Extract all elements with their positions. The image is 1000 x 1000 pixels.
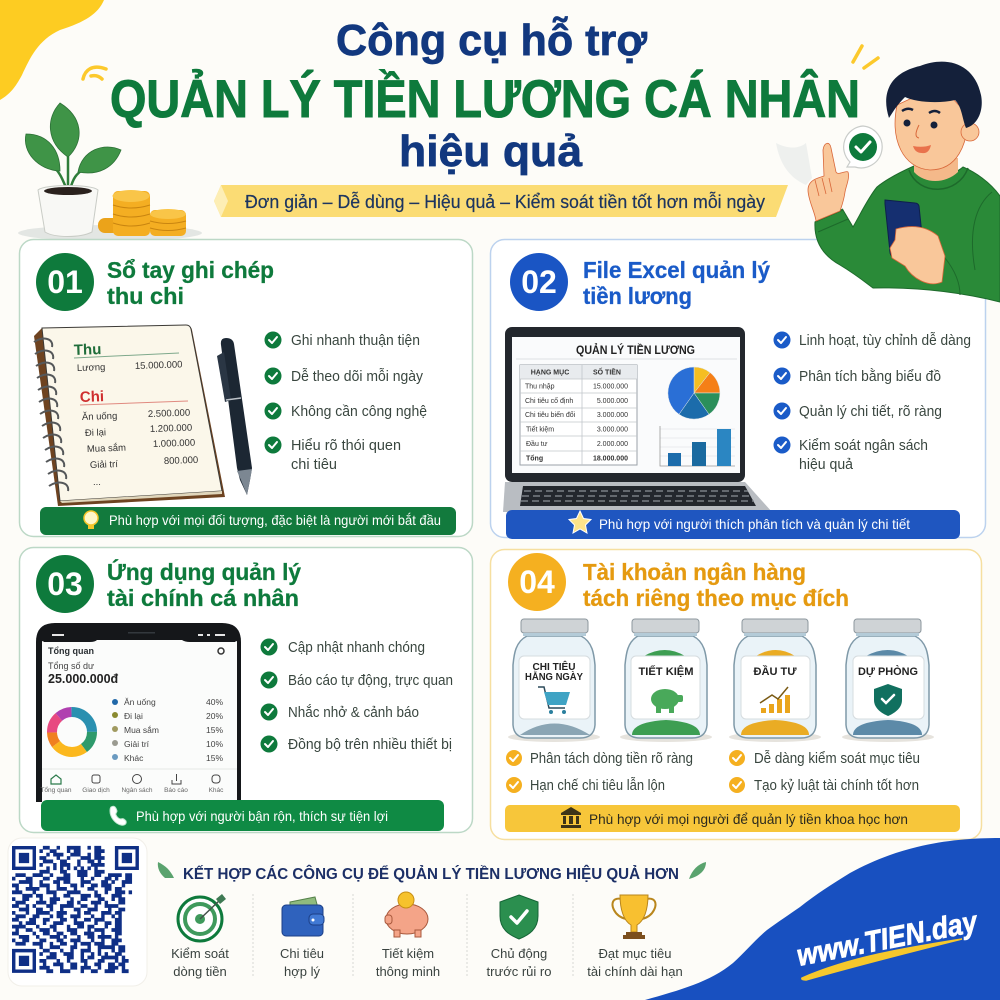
spreadsheet table: Chi tiêu cố định: [525, 396, 573, 405]
heading 03: Ứng dụng quản lý: [107, 558, 301, 585]
illustration: man with phone: [776, 46, 1000, 302]
icon: notebook: 15.000.000: [135, 359, 183, 372]
bullet: Kiểm soát ngân sách: [799, 438, 928, 454]
footer benefits: [171, 892, 683, 979]
icon: target: [178, 894, 226, 941]
spreadsheet table: 3.000.000: [597, 426, 628, 434]
app nav bar: Khác: [209, 787, 224, 794]
heading 03: [107, 558, 301, 611]
footer heading: KẾT HỢP CÁC CÔNG CỤ ĐỂ QUẢN LÝ TIỀN LƯƠNG HIỆU QUẢ HƠN: [183, 865, 679, 883]
donut legend: Đi lại: [124, 711, 143, 721]
icon: rising bars: [760, 687, 790, 713]
banner 02: Phù hợp với người thích phân tích và quản lý chi tiết: [599, 516, 910, 532]
icon: leaf left: [158, 862, 174, 878]
speech bubble check: [844, 126, 882, 168]
paper smudge: [776, 143, 812, 185]
app nav bar: Ngân sách: [121, 787, 153, 794]
jar: đầu tư: ĐẦU TƯ: [754, 665, 797, 678]
phone app mockup: Tổng quan: [48, 646, 94, 656]
icon: notebook: Đi lại: [85, 427, 106, 439]
yellow corner blob: [0, 0, 104, 100]
hair: [886, 62, 982, 128]
icon: notebook: Lương: [77, 362, 106, 374]
icon: light bulb: [84, 511, 98, 529]
title: QUẢN LÝ TIỀN LƯƠNG CÁ NHÂN: [110, 68, 860, 129]
spreadsheet table: 5.000.000: [597, 398, 628, 405]
heading 02: [583, 257, 770, 309]
head: [895, 85, 968, 170]
donut legend: 10%: [206, 739, 223, 749]
benefit label: tài chính dài hạn: [587, 964, 683, 979]
icon: notebook: 1.000.000: [153, 438, 195, 450]
heading 02: File Excel quản lý: [583, 257, 770, 283]
icon: star: [569, 511, 591, 533]
bullet list 03: [260, 638, 453, 753]
icon: piggy bank: [385, 892, 428, 937]
app nav bar: Tổng quan: [40, 786, 72, 794]
icon: notebook: Mua sắm: [87, 443, 126, 455]
heading 04: Tài khoản ngân hàng: [583, 559, 806, 585]
bullet: chi tiêu: [291, 457, 337, 473]
banner 01: [40, 507, 456, 535]
banner 03: Phù hợp với người bận rộn, thích sự tiện lợi: [136, 808, 388, 824]
donut legend: 40%: [206, 697, 223, 707]
icon: pen: [217, 338, 252, 495]
bullet list 02: [774, 332, 971, 473]
jar: đầu tư: [729, 619, 821, 742]
blue corner with website: [645, 838, 1000, 1000]
icon: wallet: [282, 897, 324, 936]
benefit label: Đạt mục tiêu: [599, 946, 671, 961]
icon: notebook: 800.000: [164, 455, 198, 467]
bullet: [264, 436, 401, 473]
benefit label: hợp lý: [284, 964, 320, 979]
heading 03: tài chính cá nhân: [107, 585, 299, 611]
phone app mockup: 25.000.000đ: [48, 672, 119, 686]
icon: notebook: Chi: [80, 388, 104, 406]
subtitle ribbon: [214, 185, 788, 217]
panel: 01 notebook: [20, 240, 472, 536]
title: [110, 15, 860, 176]
icon: notebook: 1.200.000: [150, 423, 192, 435]
pie chart: [668, 367, 720, 419]
spreadsheet table: Tiết kiệm: [526, 424, 554, 434]
title: Công cụ hỗ trợ: [336, 15, 648, 65]
banner 01: Phù hợp với mọi đối tượng, đặc biệt là người mới bắt đầu: [109, 512, 441, 528]
number badge 03: 03: [47, 566, 83, 602]
number badge 01: [36, 253, 94, 311]
banner 03: [41, 800, 444, 831]
spreadsheet table: SỐ TIỀN: [593, 366, 621, 376]
icon: green shield: [500, 895, 538, 939]
donut legend: 20%: [206, 711, 223, 721]
pointing hand: [808, 143, 849, 221]
benefit label: Chủ động: [491, 946, 547, 961]
panel: 03 app: [20, 548, 472, 832]
benefit label: dòng tiền: [173, 964, 227, 979]
bullet: Nhắc nhở & cảnh báo: [288, 704, 419, 721]
icon: notebook: Giải trí: [90, 459, 118, 471]
jar: tiết kiệm: TIẾT KIỆM: [638, 665, 694, 678]
panel: 02 excel: [490, 240, 986, 539]
phone: [885, 200, 922, 257]
number badge 02: 02: [521, 264, 557, 300]
icon: notebook: 2.500.000: [148, 408, 190, 420]
bullet: Dễ dàng kiểm soát mục tiêu: [754, 750, 920, 767]
icon: bank: [561, 807, 581, 828]
subtitle ribbon: Đơn giản – Dễ dùng – Hiệu quả – Kiểm soát tiền tốt hơn mỗi ngày: [245, 191, 765, 212]
sweater: [815, 166, 1000, 302]
spreadsheet table: [520, 365, 637, 465]
icon: laptop with spreadsheet: [503, 327, 772, 512]
benefit label: thông minh: [376, 964, 440, 979]
bullet: Báo cáo tự động, trực quan: [288, 673, 453, 689]
panel: 04 bank accounts: [490, 550, 982, 840]
spreadsheet table: 18.000.000: [593, 456, 628, 462]
website address: www.TIEN.day: [794, 905, 981, 973]
number badge 04: 04: [519, 564, 555, 600]
icon: notebook: Thu: [74, 341, 102, 359]
app nav bar: Báo cáo: [164, 787, 188, 794]
heading 04: tách riêng theo mục đích: [583, 585, 849, 611]
benefit label: Kiểm soát: [171, 946, 229, 961]
icon: teal shield: [874, 684, 902, 716]
bullet list 01: [264, 332, 427, 473]
donut legend: Khác: [124, 753, 144, 763]
jar: chi tiêu hằng ngày: HẰNG NGÀY: [525, 670, 583, 683]
bullet: Hiểu rõ thói quen: [291, 438, 401, 454]
heading 01: Sổ tay ghi chép: [107, 257, 274, 283]
spreadsheet table: 15.000.000: [593, 384, 628, 390]
number badge 02: [510, 253, 568, 311]
icon: yellow sparks right: [853, 46, 878, 68]
donut chart: [52, 712, 92, 752]
app nav bar: [40, 774, 224, 794]
heading 01: thu chi: [107, 283, 184, 309]
holding hand: [890, 227, 945, 284]
icon: notebook: ...: [93, 477, 101, 488]
bullet list 04: [506, 750, 920, 794]
jar: dự phòng: [842, 619, 934, 742]
phone app mockup: Tổng số dư: [48, 661, 94, 671]
spreadsheet table: Tổng: [526, 454, 543, 462]
benefit label: trước rủi ro: [487, 964, 551, 979]
bullet: Phân tách dòng tiền rõ ràng: [530, 751, 693, 767]
benefit label: Chi tiêu: [280, 946, 324, 961]
bullet: Ghi nhanh thuận tiện: [291, 333, 420, 349]
donut legend: 15%: [206, 725, 223, 735]
banner 04: Phù hợp với mọi người để quản lý tiền khoa học hơn: [589, 811, 908, 827]
bullet: Dễ theo dõi mỗi ngày: [291, 368, 424, 385]
icon: cart: [538, 687, 570, 714]
spreadsheet table: 3.000.000: [597, 412, 628, 419]
heading 02: tiền lương: [583, 283, 692, 309]
number badge 04: [508, 553, 566, 611]
jar: chi tiêu hằng ngày: CHI TIÊU: [532, 660, 576, 673]
bullet: [774, 436, 928, 473]
spreadsheet table: Chi tiêu biến đổi: [525, 410, 576, 419]
spreadsheet table: 2.000.000: [597, 441, 628, 448]
icon: telephone: [110, 806, 126, 825]
bullet: Tạo kỷ luật tài chính tốt hơn: [754, 778, 919, 794]
number badge 03: [36, 555, 94, 613]
donut legend: 15%: [206, 753, 223, 763]
yellow underline: [802, 939, 962, 980]
icon: laptop with spreadsheet: QUẢN LÝ TIỀN LƯƠNG: [576, 344, 695, 357]
neck: [914, 158, 958, 181]
face details: [902, 109, 940, 153]
bullet: Hạn chế chi tiêu lẫn lộn: [530, 777, 665, 794]
icon: green piggy: [651, 689, 683, 713]
icon: leaf right: [689, 862, 706, 879]
icon: trophy: [613, 895, 655, 939]
donut legend: Mua sắm: [124, 725, 159, 735]
donut legend: [112, 697, 223, 763]
bullet: Cập nhật nhanh chóng: [288, 640, 425, 656]
bullet: Đồng bộ trên nhiều thiết bị: [288, 737, 452, 753]
bullet: Phân tích bằng biểu đồ: [799, 368, 941, 385]
donut legend: Giải trí: [124, 739, 150, 749]
icon: plant in pot: [18, 103, 202, 241]
heading 04: [583, 559, 849, 611]
app nav bar: Giao dịch: [82, 787, 110, 794]
jar: chi tiêu hằng ngày: [508, 619, 600, 742]
spreadsheet table: Thu nhập: [525, 384, 555, 390]
QR code: [8, 838, 147, 986]
spreadsheet table: HẠNG MỤC: [531, 370, 569, 376]
spreadsheet table: Đầu tư: [526, 439, 548, 448]
banner 02: [506, 510, 960, 539]
banner 04: [505, 805, 960, 832]
icon: yellow sparks left: [83, 67, 106, 79]
jar: dự phòng: DỰ PHÒNG: [858, 665, 918, 678]
benefit label: Tiết kiệm: [382, 946, 434, 961]
icon: notebook: Ăn uống: [82, 411, 117, 423]
title: hiệu quả: [399, 127, 583, 176]
phone app mockup: [36, 623, 241, 802]
bullet: Không cần công nghệ: [291, 404, 427, 420]
heading 01: [107, 257, 274, 309]
jar: tiết kiệm: [620, 619, 712, 742]
bullet: Quản lý chi tiết, rõ ràng: [799, 404, 942, 420]
icon: gold coins: [98, 190, 186, 236]
number badge 01: 01: [47, 264, 83, 300]
donut legend: Ăn uống: [124, 697, 156, 707]
bar chart: [660, 426, 735, 466]
bullet: hiệu quả: [799, 457, 854, 473]
bullet: Linh hoạt, tùy chỉnh dễ dàng: [799, 332, 971, 349]
icon: notebook: [34, 325, 225, 506]
